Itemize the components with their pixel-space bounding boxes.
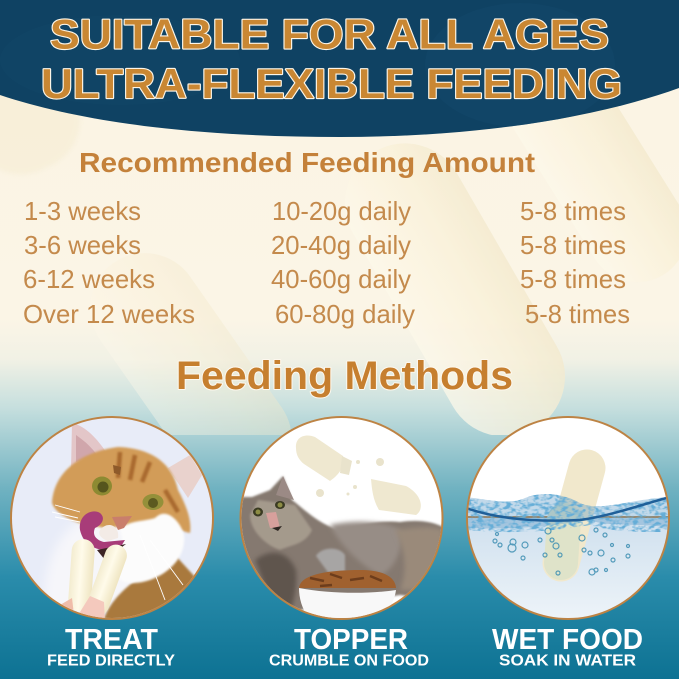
row: 1-3 weeks: [24, 196, 626, 226]
row: 1-3 weeks: 1-3 weeks: [24, 196, 141, 226]
icon: broken capsule, whole half: [296, 435, 343, 481]
icon: gray cat: [238, 476, 445, 620]
title: [41, 10, 622, 107]
header shading: [510, 116, 574, 126]
label: wet food: SOAK IN WATER: [499, 652, 636, 670]
row: over 12 weeks: Over 12 weeks: [23, 299, 195, 329]
row: 6-12 weeks: 40-60g daily: [271, 264, 411, 294]
row: 3-6 weeks: [24, 230, 626, 260]
heading: feeding methods: Feeding Methods: [176, 354, 513, 398]
row: 3-6 weeks: 3-6 weeks: [24, 230, 141, 260]
label: topper: [269, 624, 429, 670]
title: ULTRA-FLEXIBLE FEEDING: [41, 60, 622, 107]
icon: bowl of kibble: [299, 570, 396, 622]
feeding amount table: [23, 196, 630, 329]
row: 6-12 weeks: [23, 264, 626, 294]
icon: bubbles: [493, 528, 630, 575]
heading: recommended feeding amount: Recommended Feeding Amount: [79, 147, 535, 178]
label: wet food: [492, 624, 643, 670]
row: 6-12 weeks: 5-8 times: [520, 264, 626, 294]
row: 3-6 weeks: 20-40g daily: [271, 230, 411, 260]
icon: capsules held by fingers: [62, 539, 127, 618]
row: 3-6 weeks: 5-8 times: [520, 230, 626, 260]
label: treat: [47, 624, 175, 670]
icon: capsule in water: [561, 468, 587, 563]
row: over 12 weeks: 60-80g daily: [275, 299, 415, 329]
label: topper: CRUMBLE ON FOOD: [269, 652, 429, 670]
header banner: [0, 0, 679, 137]
icon: capsule crumbs: [316, 456, 384, 497]
icon: orange cat: [45, 423, 202, 625]
panel: treat photo: [10, 416, 214, 625]
row: 6-12 weeks: 6-12 weeks: [23, 264, 155, 294]
panel: topper photo: [238, 416, 445, 622]
label: treat: TREAT: [65, 624, 158, 656]
label: wet food: WET FOOD: [492, 624, 643, 656]
row: over 12 weeks: 5-8 times: [525, 299, 630, 329]
panel: wet food photo: [466, 416, 670, 622]
title: SUITABLE FOR ALL AGES: [50, 10, 609, 58]
icon: capsule half: [371, 479, 421, 515]
row: over 12 weeks: [23, 299, 630, 329]
background capsule pattern: [0, 95, 679, 435]
row: 1-3 weeks: 5-8 times: [520, 196, 626, 226]
row: 1-3 weeks: 10-20g daily: [272, 196, 411, 226]
label: topper: TOPPER: [294, 624, 408, 656]
icon: water splash band: [466, 494, 670, 532]
label: treat: FEED DIRECTLY: [47, 652, 175, 670]
